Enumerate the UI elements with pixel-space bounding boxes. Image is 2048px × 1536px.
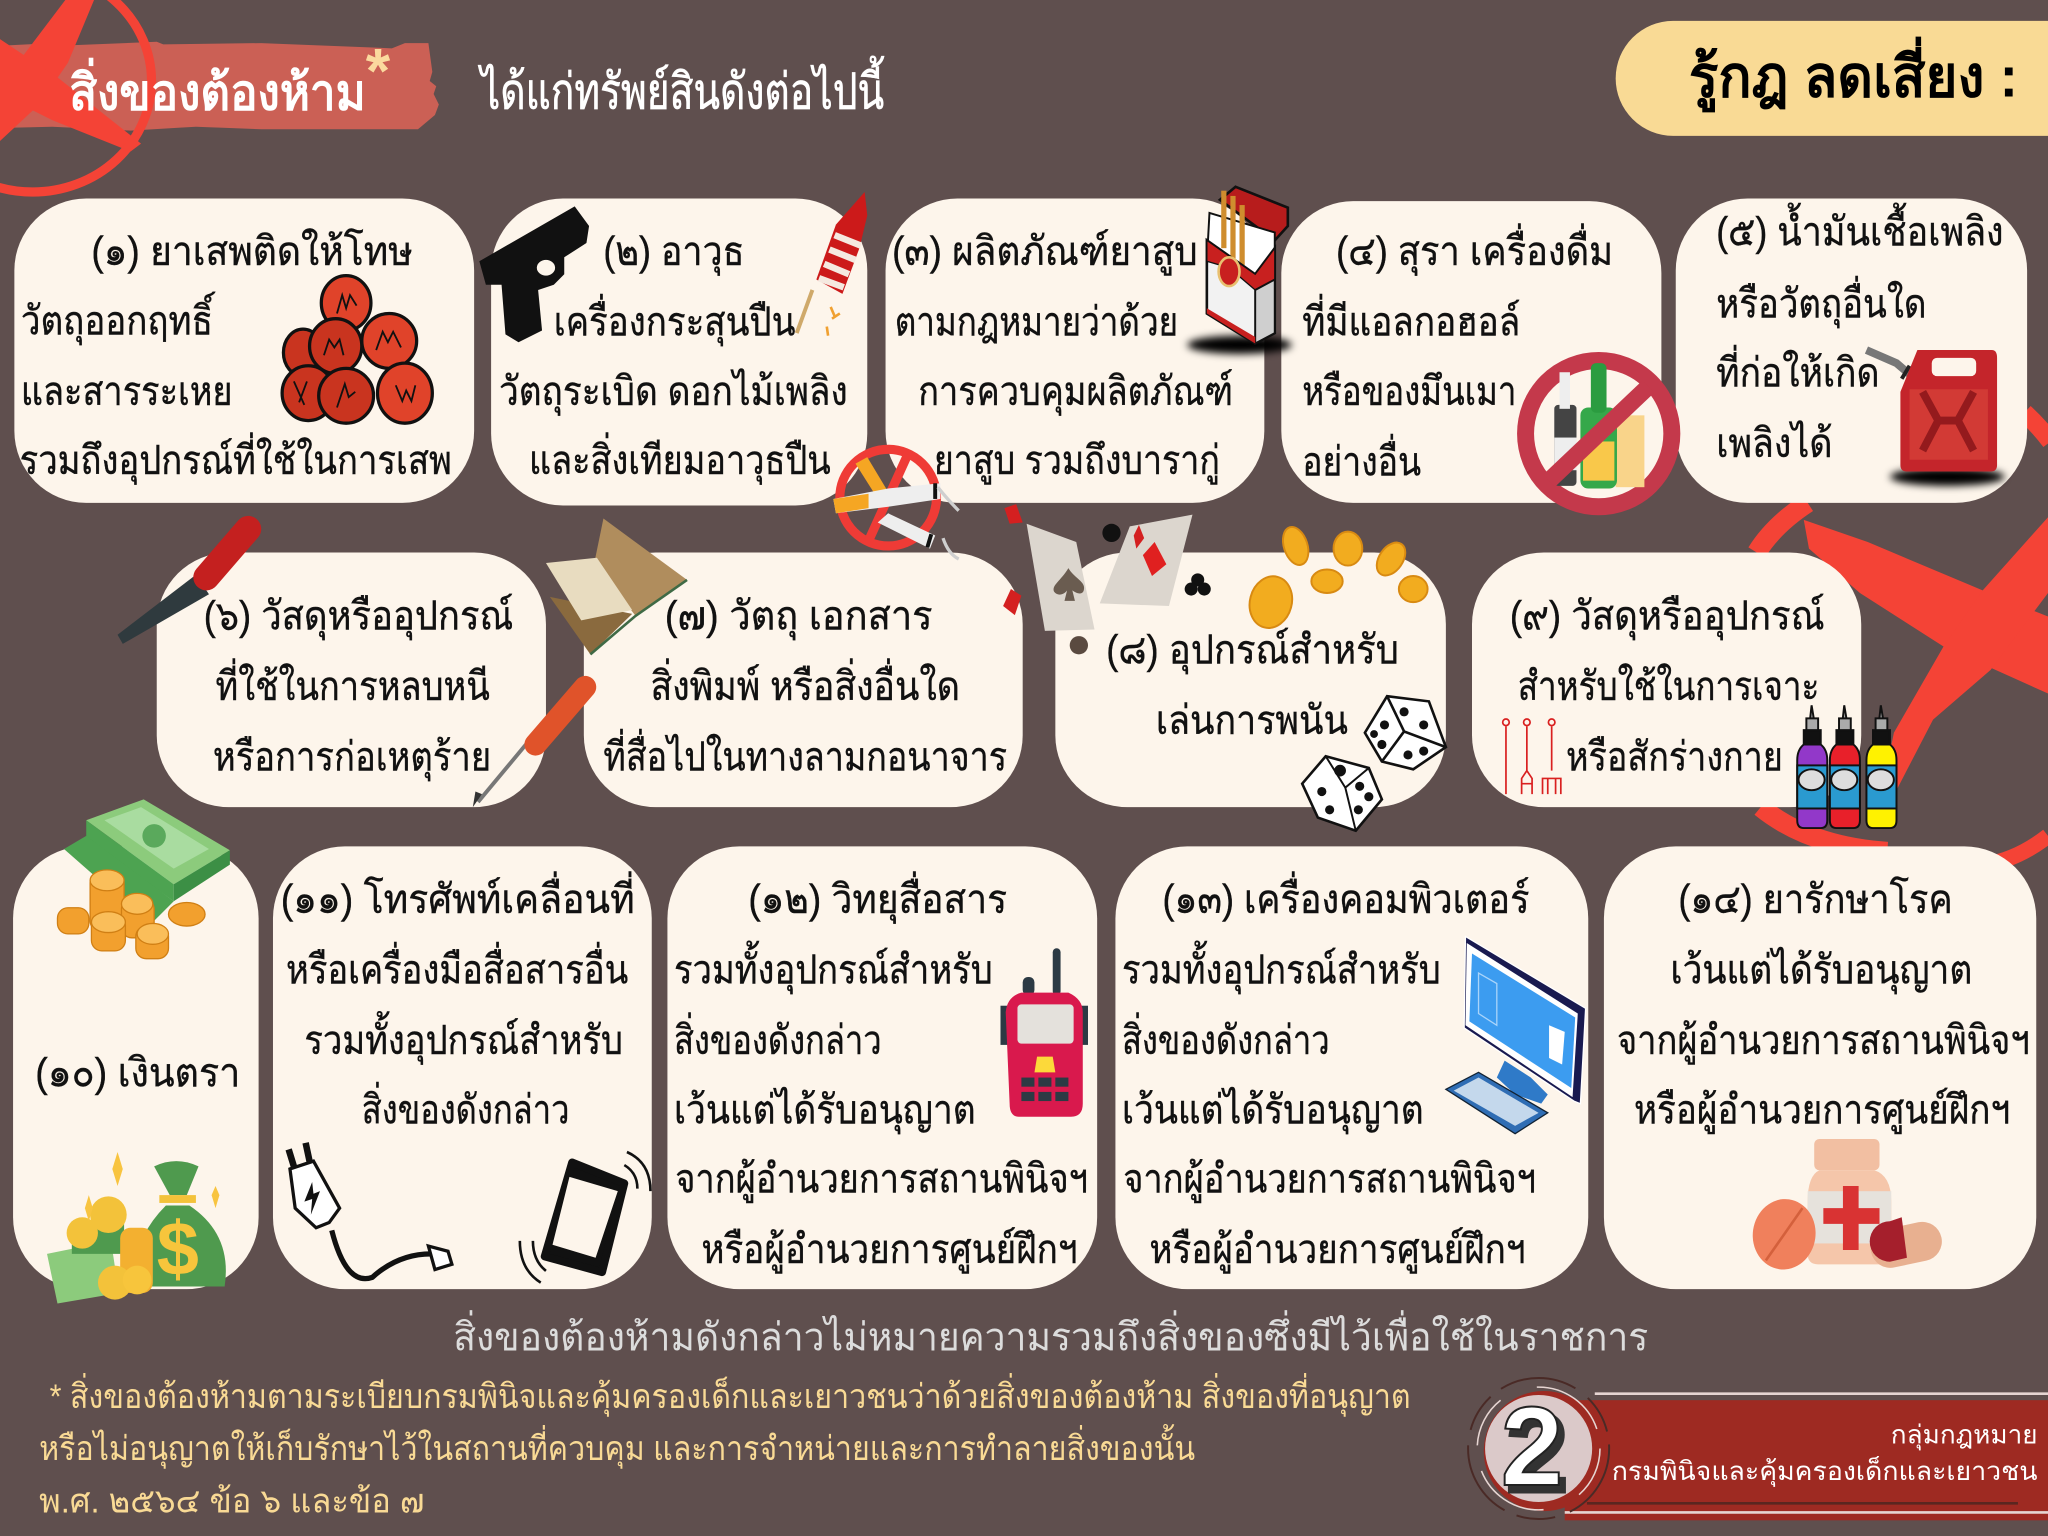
- title: prohibited items: สิ่งของต้องห้าม: [69, 58, 366, 121]
- icon: playing cards: [1003, 504, 1211, 654]
- panel 4: alcohol: หรือของมึนเมา: [1302, 368, 1516, 414]
- panel 6: escape tools: (๖) วัสดุหรืออุปกรณ์: [204, 593, 513, 641]
- panel 4: alcohol: [1281, 201, 1661, 503]
- panel 1: narcotics: รวมถึงอุปกรณ์ที่ใช้ในการเสพ: [20, 432, 452, 485]
- panel 6: escape tools: ที่ใช้ในการหลบหนี: [216, 658, 490, 709]
- footnote: พ.ศ. ๒๕๖๔ ข้อ ๖ และข้อ ๗: [39, 1482, 424, 1520]
- panel 12: radio: รวมทั้งอุปกรณ์สำหรับ: [674, 941, 993, 995]
- icon: charger plug: [289, 1143, 452, 1279]
- panel 13: computer: สิ่งของดังกล่าว: [1122, 1012, 1330, 1063]
- badge: know the law reduce risk: [1616, 21, 2048, 136]
- panel 12: radio: (๑๒) วิทยุสื่อสาร: [748, 871, 1007, 924]
- panel 6: escape tools: หรือการก่อเหตุร้าย: [213, 734, 491, 782]
- panel 5: fuel: (๕) น้ำมันเชื้อเพลิง: [1716, 203, 2004, 255]
- panel 3: tobacco: [886, 199, 1264, 503]
- panel 2: weapons: [491, 199, 867, 505]
- icon: gold coins: [1244, 524, 1428, 633]
- panel 2: weapons: (๒) อาวุธ: [603, 228, 744, 276]
- icon: no smoking sign: [833, 449, 959, 559]
- panel 7: obscene material: (๗) วัตถุ เอกสาร: [665, 593, 933, 641]
- panel 11: phones: [273, 846, 652, 1289]
- panel 6: escape tools: [157, 552, 546, 807]
- panel 1: narcotics: และสารระเหย: [21, 368, 232, 414]
- icon: smartphone: [520, 1152, 650, 1283]
- footer banner: legal group: 2: [1501, 1383, 1563, 1509]
- panel 14: medicine: [1604, 846, 2036, 1289]
- panel 4: alcohol: (๔) สุรา เครื่องดื่ม: [1336, 223, 1613, 276]
- panel 9: tattoo: หรือสักร่างกาย: [1566, 734, 1783, 780]
- panel 11: phones: หรือเครื่องมือสื่อสารอื่น: [286, 942, 628, 993]
- icon: tattoo needles: [1503, 719, 1561, 794]
- decoration: red cross right: [1757, 413, 2048, 865]
- panel 5: fuel: หรือวัตถุอื่นใด: [1716, 275, 1927, 328]
- panel 7: obscene material: ที่สื่อไปในทางลามกอนาจาร: [603, 729, 1007, 780]
- panel 3: tobacco: การควบคุมผลิตภัณฑ์: [918, 368, 1233, 416]
- panel 13: computer: รวมทั้งอุปกรณ์สำหรับ: [1122, 941, 1441, 995]
- panel 13: computer: เว้นแต่ได้รับอนุญาต: [1122, 1086, 1424, 1134]
- panel 13: computer: (๑๓) เครื่องคอมพิวเตอร์: [1162, 871, 1529, 922]
- panel 9: tattoo: [1472, 552, 1861, 807]
- footnote: หรือไม่อนุญาตให้เก็บรักษาไว้ในสถานที่ควบคุม และการจำหน่ายและการทำลายสิ่งของนั้น: [39, 1424, 1195, 1469]
- panel 11: phones: สิ่งของดังกล่าว: [362, 1081, 569, 1132]
- panel 4: alcohol: ที่มีแอลกอฮอล์: [1302, 294, 1520, 345]
- icon: banknotes and coin stacks: [57, 799, 230, 959]
- footer banner: legal group: กรมพินิจและคุ้มครองเด็กและเยาวชน: [1612, 1455, 2038, 1487]
- icon: desktop computer: [1446, 936, 1586, 1134]
- panel 12: radio: จากผู้อำนวยการสถานพินิจฯ: [675, 1155, 1088, 1203]
- icon: medicine: [1748, 1139, 1946, 1274]
- panel 9: tattoo: (๙) วัสดุหรืออุปกรณ์: [1510, 593, 1825, 641]
- panel 12: radio: เว้นแต่ได้รับอนุญาต: [674, 1086, 976, 1134]
- panel 12: radio: [667, 846, 1097, 1289]
- icon: old book: [546, 519, 687, 654]
- badge: know the law reduce risk: รู้กฎ ลดเสี่ยง :: [1689, 37, 2018, 113]
- icon: rocket firework: [797, 192, 867, 336]
- panel 10: money: [13, 846, 259, 1289]
- icon: jerry can: [1866, 350, 2005, 486]
- panel 1: narcotics: (๑) ยาเสพติดให้โทษ: [91, 228, 413, 274]
- panel 3: tobacco: ยาสูบ รวมถึงบารากู่: [934, 437, 1220, 485]
- panel 13: computer: [1115, 846, 1588, 1289]
- panel 2: weapons: และสิ่งเทียมอาวุธปืน: [529, 432, 831, 485]
- panel 14: medicine: (๑๔) ยารักษาโรค: [1678, 876, 1953, 922]
- panel 4: alcohol: อย่างอื่น: [1302, 433, 1421, 484]
- asterisk: *: [366, 37, 391, 107]
- panel 5: fuel: ที่ก่อให้เกิด: [1716, 345, 1880, 396]
- panel 8: gambling: (๘) อุปกรณ์สำหรับ: [1106, 627, 1399, 675]
- panel 13: computer: จากผู้อำนวยการสถานพินิจฯ: [1123, 1155, 1536, 1203]
- panel 5: fuel: [1676, 199, 2027, 503]
- icon: pills: [282, 276, 432, 423]
- icon: walkie talkie: [1000, 948, 1088, 1117]
- icon: saw: [118, 529, 248, 644]
- numeral 2: 2: [1506, 1390, 1568, 1516]
- footnote: [39, 1373, 1411, 1520]
- icon: screwdriver: [473, 687, 585, 807]
- icon: no alcohol sign: [1526, 360, 1672, 507]
- panel 5: fuel: เพลิงได้: [1716, 420, 1832, 466]
- panel 12: radio: หรือผู้อำนวยการศูนย์ฝึกฯ: [701, 1226, 1078, 1274]
- panel 8: gambling: เล่นการพนัน: [1156, 697, 1348, 743]
- panel 11: phones: (๑๑) โทรศัพท์เคลื่อนที่: [281, 871, 635, 922]
- panel 9: tattoo: สำหรับใช้ในการเจาะ: [1518, 663, 1819, 709]
- icon: money bag: [47, 1152, 226, 1304]
- footer banner: legal group: กลุ่มกฎหมาย: [1891, 1419, 2038, 1450]
- panel 11: phones: รวมทั้งอุปกรณ์สำหรับ: [304, 1011, 623, 1065]
- icon: ink bottles: [1797, 705, 1896, 828]
- subtitle: ได้แก่ทรัพย์สินดังต่อไปนี้: [478, 55, 884, 119]
- panel 13: computer: หรือผู้อำนวยการศูนย์ฝึกฯ: [1149, 1226, 1526, 1274]
- icon: cigarette pack: [1187, 187, 1292, 354]
- footer banner: legal group: [1468, 1378, 2048, 1520]
- caption: สิ่งของต้องห้ามดังกล่าวไม่หมายความรวมถึงสิ่งของซึ่งมีไว้เพื่อใช้ในราชการ: [453, 1310, 1648, 1360]
- panel 3: tobacco: ตามกฎหมายว่าด้วย: [895, 299, 1178, 345]
- panel 7: obscene material: [584, 552, 1023, 807]
- icon: money bag: $: [157, 1207, 199, 1292]
- panel 8: gambling: [1055, 552, 1446, 807]
- panel 3: tobacco: (๓) ผลิตภัณฑ์ยาสูบ: [892, 228, 1198, 276]
- footnote: * สิ่งของต้องห้ามตามระเบียบกรมพินิจและคุ้มครองเด็กและเยาวชนว่าด้วยสิ่งของต้องห้าม สิ่งของที่อนุญาต: [50, 1373, 1411, 1417]
- panel 10: money: (๑๐) เงินตรา: [35, 1050, 240, 1096]
- panel 2: weapons: วัตถุระเบิด ดอกไม้เพลิง: [499, 368, 848, 416]
- panel 2: weapons: เครื่องกระสุนปืน: [554, 294, 795, 347]
- icon: handgun: [479, 206, 589, 342]
- icon: dice: [1302, 696, 1446, 831]
- panel 12: radio: สิ่งของดังกล่าว: [674, 1012, 882, 1063]
- panel 14: medicine: เว้นแต่ได้รับอนุญาต: [1671, 947, 1972, 995]
- panel 1: narcotics: [14, 199, 474, 503]
- title banner: brush stroke: [0, 0, 439, 192]
- panel 7: obscene material: สิ่งพิมพ์ หรือสิ่งอื่นใด: [650, 658, 960, 709]
- panel 1: narcotics: วัตถุออกฤทธิ์: [21, 291, 216, 345]
